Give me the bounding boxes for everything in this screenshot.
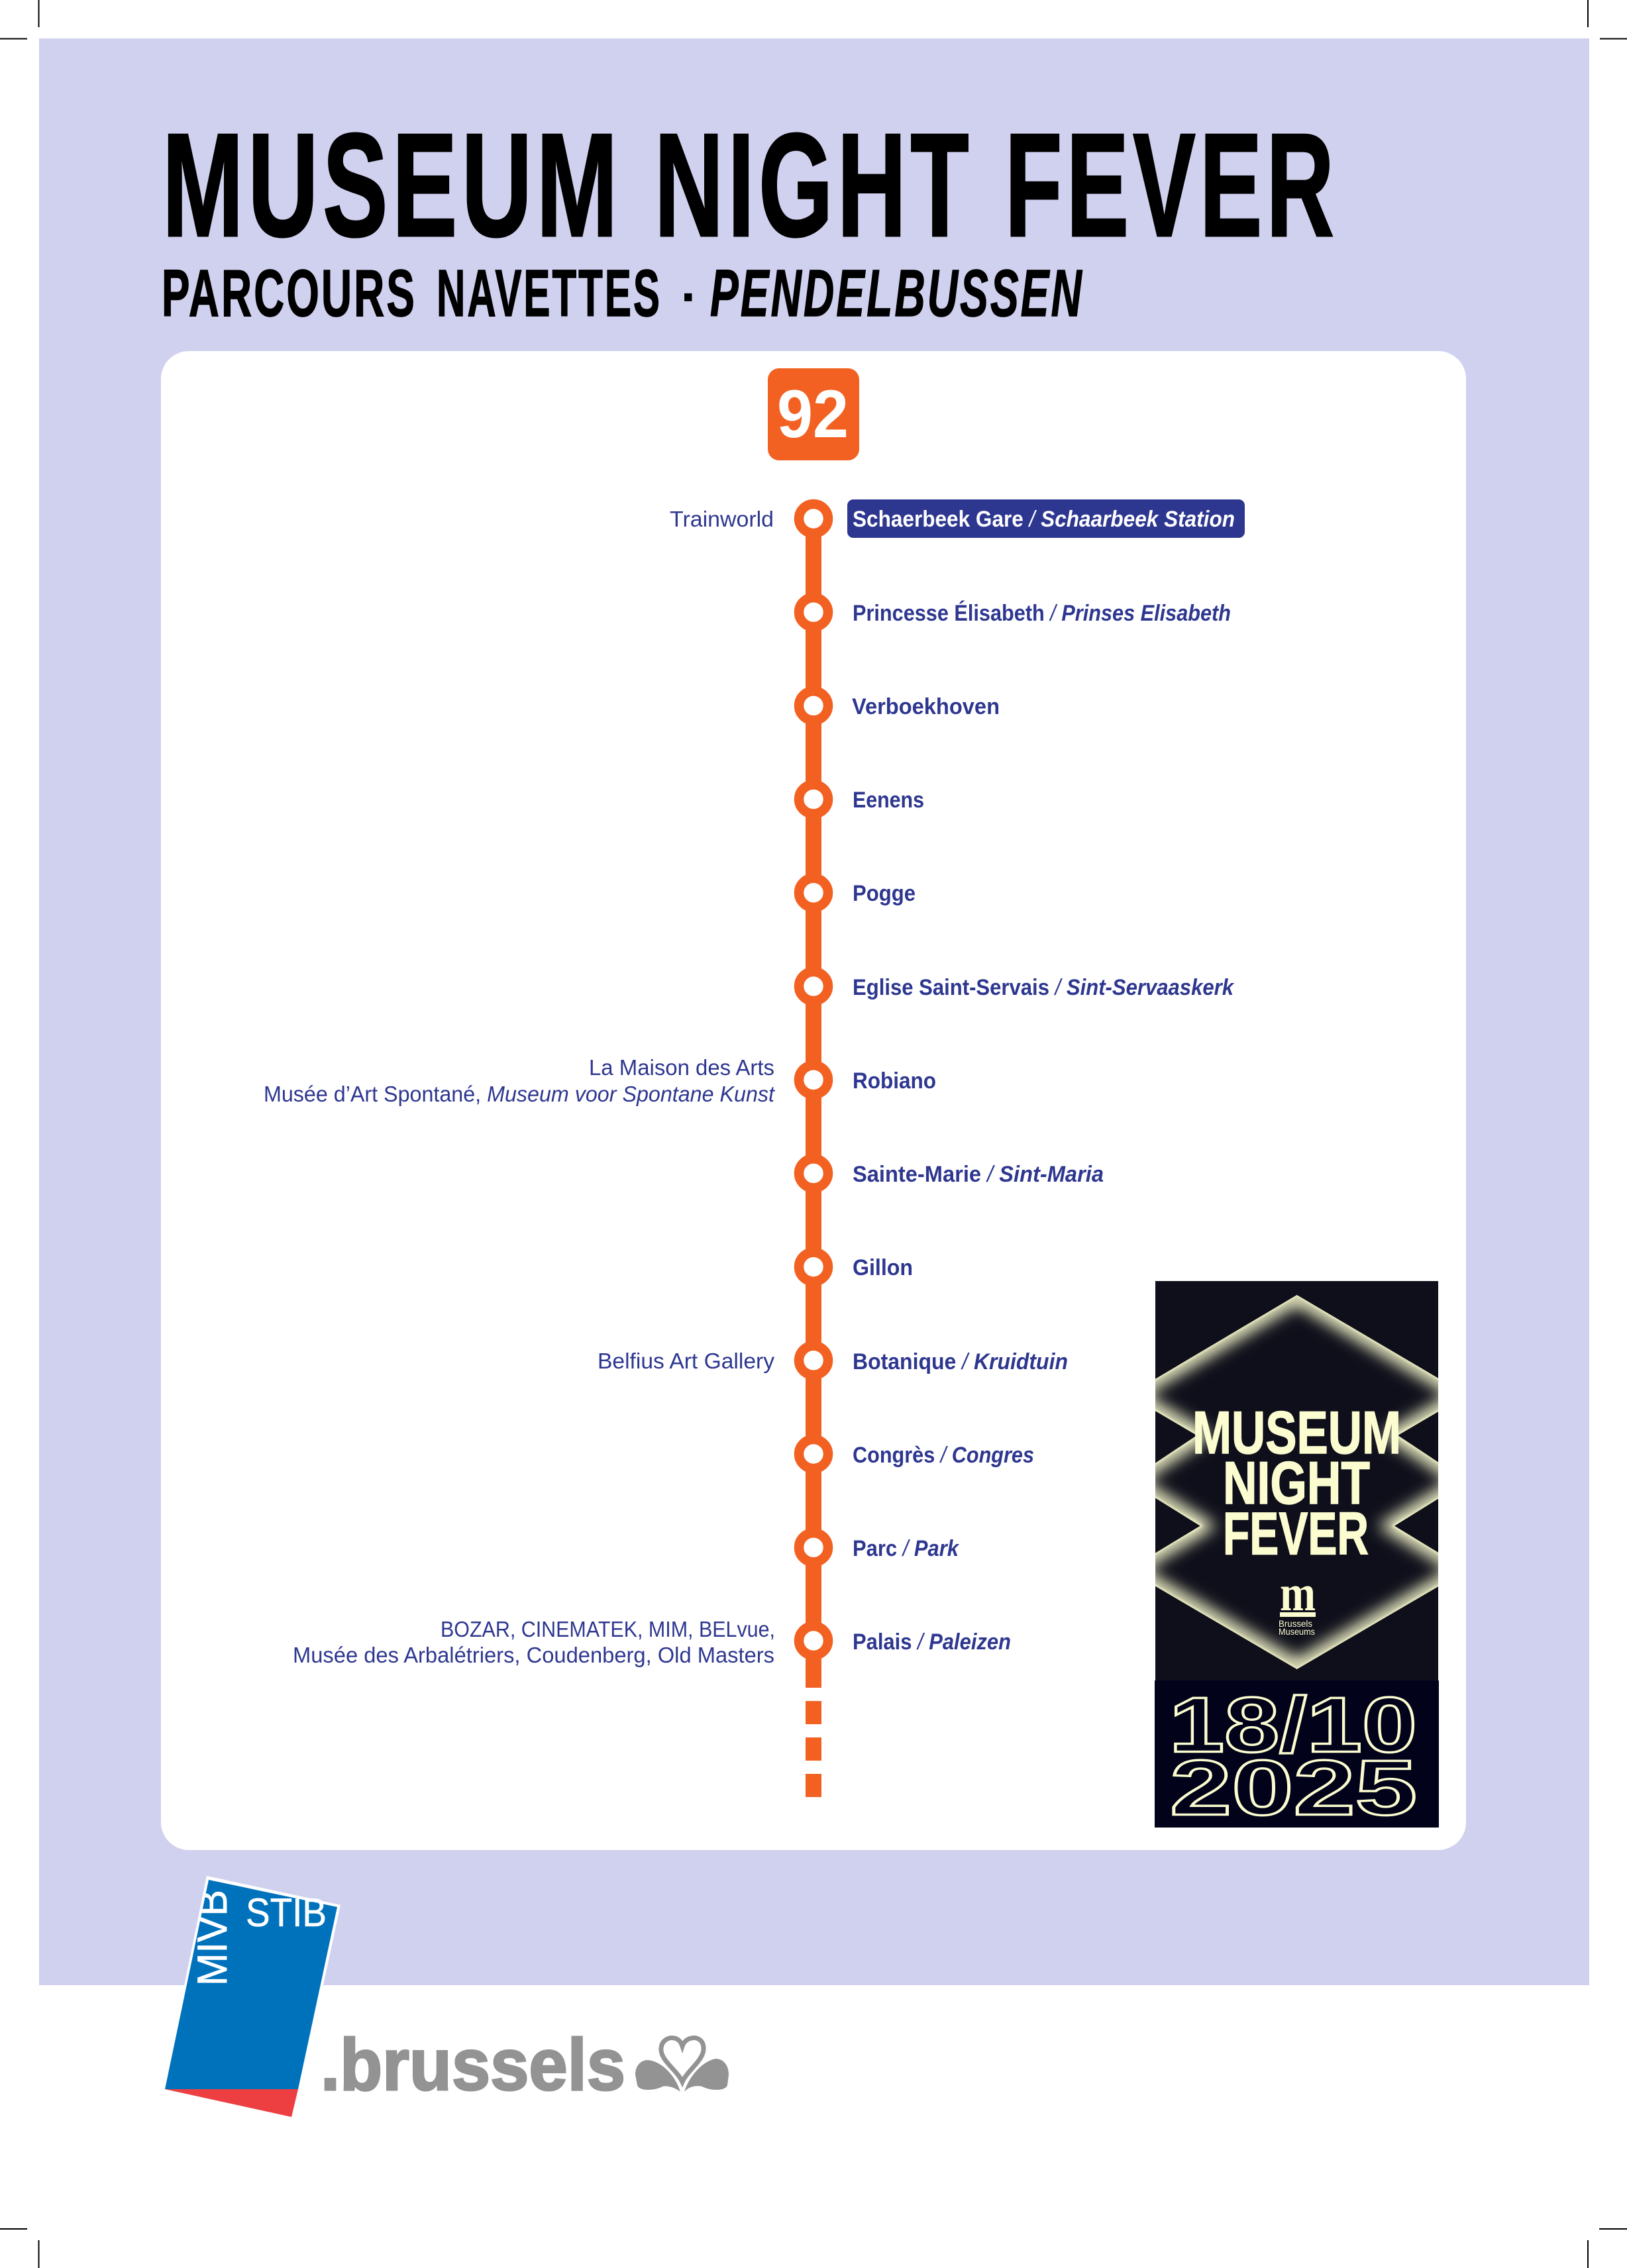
- museum: La Maison des Arts: [264, 1055, 776, 1106]
- stop: Robiano: Robiano: [853, 1068, 936, 1094]
- line number badge: [768, 368, 859, 460]
- poster title: FEVER: [1223, 1501, 1369, 1567]
- title: NIGHT: [655, 103, 973, 268]
- museum: La Maison des Arts: Musée d’Art Spontané, Museum voor Spontane Kunst: [264, 1082, 776, 1106]
- title: FEVER: [1005, 103, 1338, 268]
- stop: Botanique: Botanique / Kruidtuin: [853, 1349, 1068, 1374]
- subtitle: PARCOURS: [162, 256, 417, 331]
- stop: Schaerbeek Gare: Schaerbeek Gare / Schaarbeek Station: [853, 507, 1235, 532]
- museum: BOZAR group: [293, 1617, 775, 1667]
- logo: .brussels: .brussels: [321, 2024, 625, 2106]
- brussels museums logo: m: [1280, 1565, 1316, 1622]
- date text: 18/10: [1169, 1681, 1417, 1769]
- poster title: NIGHT: [1223, 1450, 1370, 1517]
- stop: Schaerbeek Gare: [847, 499, 1245, 538]
- stop: Eenens: Eenens: [853, 788, 924, 813]
- brussels museums logo: Brussels: [1279, 1618, 1312, 1629]
- route line: [806, 519, 821, 1797]
- stop: Princesse Élisabeth: Princesse Élisabeth / Prinses Elisabeth: [853, 601, 1231, 626]
- stop markers: [799, 504, 828, 1655]
- poster glow shape: [1155, 1295, 1438, 1669]
- stop: Pogge: Pogge: [853, 881, 916, 906]
- museum: La Maison des Arts: La Maison des Arts: [589, 1055, 774, 1080]
- panel: route card: [161, 351, 1466, 1850]
- stop: Eglise Saint-Servais: Eglise Saint-Servais / Sint-Servaaskerk: [853, 975, 1235, 1000]
- subtitle: NAVETTES: [437, 256, 662, 331]
- title: [162, 103, 1338, 268]
- museum: Belfius Art Gallery: Belfius Art Gallery: [598, 1349, 775, 1373]
- date band: [1155, 1680, 1439, 1828]
- line number badge: 92: [777, 376, 849, 452]
- logo: STIB MIVB: STIB: [246, 1890, 327, 1935]
- poster: Museum Night Fever: [1155, 1281, 1439, 1828]
- brussels museums logo: [1279, 1565, 1316, 1637]
- poster title: [1192, 1400, 1401, 1567]
- icon: brussels iris: [635, 2038, 729, 2092]
- stop: Congrès: Congrès / Congres: [853, 1443, 1034, 1468]
- museum: BOZAR group: Musée des Arbalétriers, Coudenberg, Old Masters: [293, 1643, 774, 1667]
- stop: Gillon: Gillon: [853, 1255, 913, 1280]
- logo: STIB MIVB: MIVB: [189, 1890, 236, 1986]
- subtitle: [162, 256, 1084, 331]
- museum: BOZAR group: BOZAR, CINEMATEK, MIM, BELvue,: [441, 1617, 775, 1641]
- poster title: MUSEUM: [1192, 1400, 1401, 1467]
- date text: [1169, 1681, 1417, 1832]
- subtitle: PENDELBUSSEN: [710, 256, 1084, 331]
- title: MUSEUM: [162, 103, 622, 268]
- stop: Verboekhoven: Verboekhoven: [852, 694, 1000, 719]
- date text: 2025: [1170, 1745, 1417, 1832]
- museum: Trainworld: Trainworld: [670, 507, 774, 531]
- stop: Parc: Parc / Park: [853, 1536, 960, 1561]
- stop: Sainte-Marie: Sainte-Marie / Sint-Maria: [853, 1162, 1104, 1187]
- logo: STIB MIVB: [163, 1876, 341, 2117]
- brussels museums logo: Museums: [1279, 1626, 1315, 1637]
- subtitle: ·: [682, 271, 697, 323]
- stop: Palais: Palais / Paleizen: [853, 1629, 1011, 1655]
